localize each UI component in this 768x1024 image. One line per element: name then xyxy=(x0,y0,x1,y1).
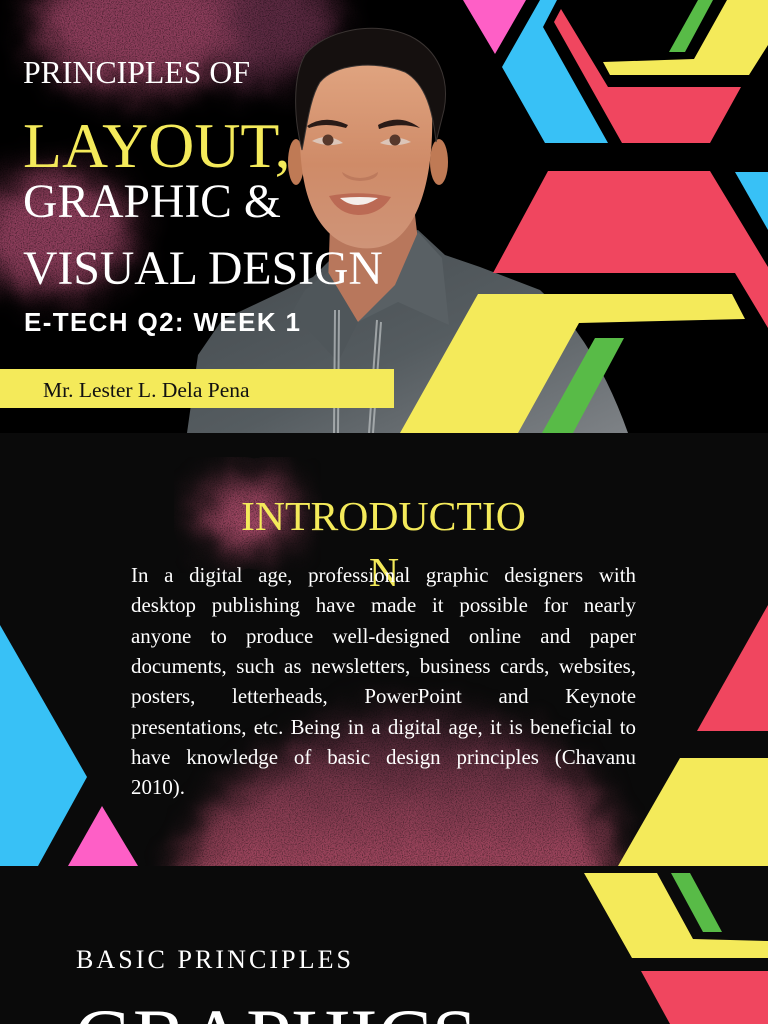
irises xyxy=(322,134,334,146)
heading: visual design: VISUAL DESIGN xyxy=(23,242,383,295)
text block: introduction paragraph: posters, letterheads, PowerPoint and Keynote xyxy=(131,684,636,708)
text block: introduction paragraph: In a digital age, professional graphic designers with xyxy=(131,563,636,587)
portrait illustration xyxy=(187,28,628,433)
shirt xyxy=(187,230,628,433)
shape: blue triangle left xyxy=(0,625,87,866)
text block: introduction paragraph: desktop publishing have made it possible for nearly xyxy=(131,593,636,617)
shape: green band top xyxy=(669,0,713,52)
text block: introduction paragraph: documents, such as newsletters, business cards, websites, xyxy=(131,654,636,678)
teeth xyxy=(340,197,378,205)
text block: introduction paragraph xyxy=(131,563,636,799)
face xyxy=(300,62,432,248)
shape: yellow band top xyxy=(603,0,768,75)
paint splash: hero left xyxy=(0,172,130,292)
paint splash: intro bottom xyxy=(175,709,612,895)
text block: introduction paragraph: have knowledge of basic design principles (Chavanu xyxy=(131,745,636,769)
shape: green band bottom xyxy=(671,873,722,932)
shape: red band top xyxy=(554,9,741,143)
shape: pink triangle left xyxy=(68,806,138,866)
panel: hero background xyxy=(0,0,768,433)
shape: blue band top xyxy=(502,0,608,143)
ears xyxy=(288,139,304,185)
text block: introduction paragraph: 2010). xyxy=(131,775,185,799)
shape: big red band xyxy=(493,171,768,328)
eyebrows xyxy=(307,120,420,129)
collar left xyxy=(292,272,358,362)
shape: red band bottom xyxy=(641,971,768,1024)
shape: green band lower xyxy=(542,338,624,433)
heading: principles of: PRINCIPLES OF xyxy=(23,55,250,90)
heading: introduction: INTRODUCTIO xyxy=(241,494,526,540)
shape: pink triangle top xyxy=(463,0,526,54)
placket stitching xyxy=(334,310,381,433)
lips xyxy=(329,193,391,215)
subheading: week: E-TECH Q2: WEEK 1 xyxy=(24,307,300,337)
paint splash: intro heading xyxy=(202,479,294,551)
shape: red triangle right xyxy=(697,605,768,731)
author bar xyxy=(0,369,394,408)
nose xyxy=(342,172,378,181)
shape: blue corner right xyxy=(735,172,768,230)
panel: introduction background xyxy=(0,433,768,866)
hair xyxy=(296,28,446,150)
author bar: Mr. Lester L. Dela Pena xyxy=(43,378,250,402)
heading: introduction xyxy=(241,494,526,596)
neck xyxy=(328,215,420,322)
text block: introduction paragraph: presentations, etc. Being in a digital age, it is beneficial to xyxy=(131,715,636,739)
heading: layout: LAYOUT, xyxy=(23,110,291,181)
shape: yellow band lower xyxy=(584,873,768,958)
text block: introduction paragraph: anyone to produce well-designed online and paper xyxy=(131,624,636,648)
heading: graphic: GRAPHIC & xyxy=(23,176,281,228)
collar right xyxy=(358,232,449,325)
shape: big yellow band xyxy=(400,294,745,433)
heading: introduction: N xyxy=(369,550,399,596)
paint splash: hero top xyxy=(35,0,335,91)
eyes xyxy=(312,137,411,145)
panel: basic principles background xyxy=(0,866,768,1024)
heading: basic principles: BASIC PRINCIPLES xyxy=(76,945,351,974)
shape: yellow band right xyxy=(618,758,768,866)
